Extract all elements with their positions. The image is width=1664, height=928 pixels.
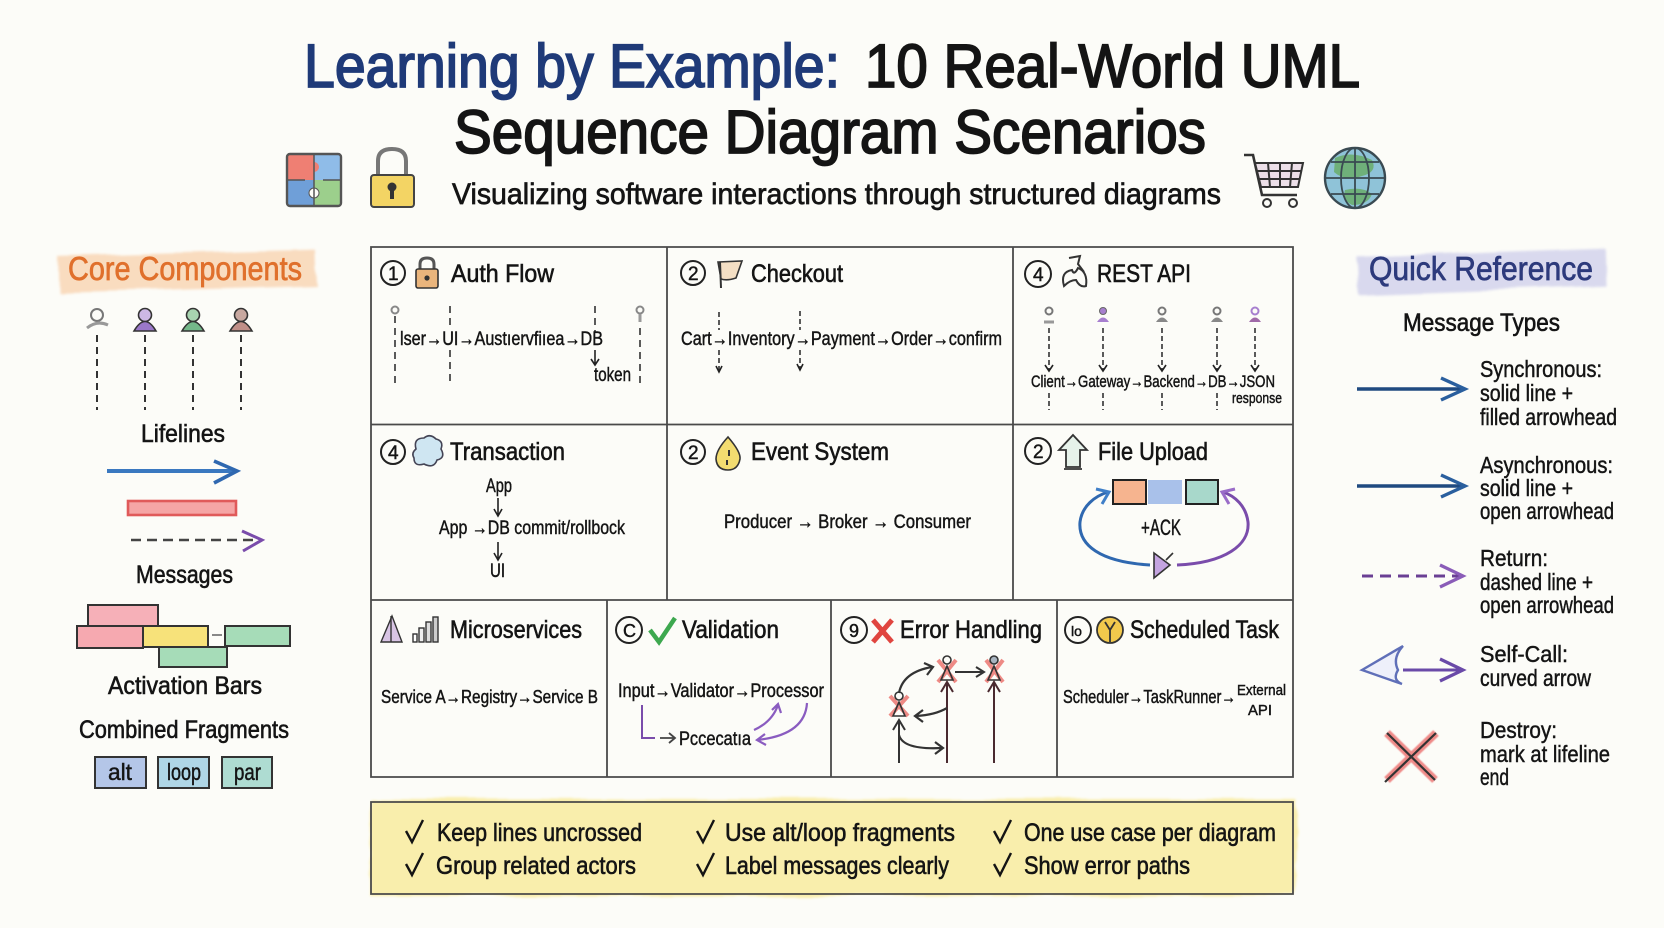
activation bars	[77, 605, 290, 667]
item: destroy: Destroy:	[1480, 717, 1557, 743]
flow: transaction: App →DB commit/rollbock	[439, 518, 625, 539]
title: Sequence Diagram Scenarios	[454, 98, 1206, 166]
flow: microservices: Service A→Registry→Service B	[381, 687, 598, 707]
column: tips 1	[406, 819, 642, 880]
sequence sketch: auth	[392, 306, 644, 386]
card: scheduled task	[1063, 616, 1286, 719]
panel: quick reference	[1357, 249, 1617, 790]
column: tips 3: One use case per diagram	[1024, 819, 1276, 847]
card: scheduled task: Scheduled Task	[1130, 616, 1279, 644]
subheading: message types: Message Types	[1403, 309, 1560, 337]
flow: scheduled task: API	[1248, 702, 1272, 719]
flow: validation: Input→Validator→Processor	[618, 681, 825, 702]
upload diagram	[1080, 480, 1248, 578]
card: auth flow: Auth Flow	[451, 260, 555, 288]
sequence sketch: checkout: Cart→Inventory→Payment→Order→confirm	[681, 329, 1002, 350]
card: event system: Event System	[751, 438, 889, 466]
upload diagram: +ACK	[1141, 515, 1181, 540]
sequence sketch: rest: response	[1232, 390, 1282, 407]
card: transaction	[381, 436, 625, 582]
card: error handling: 9	[849, 621, 859, 641]
card: event system: 2	[688, 443, 699, 464]
icon: upload arrow	[1059, 435, 1087, 469]
item: destroy	[1385, 717, 1610, 790]
item: self-call: Self-Call:	[1480, 641, 1568, 667]
label: activation bars: Activation Bars	[108, 672, 262, 700]
item: asynchronous: Asynchronous:	[1480, 452, 1613, 478]
flow: scheduled task	[1063, 682, 1286, 719]
card: validation	[616, 616, 825, 750]
flow: transaction	[439, 476, 625, 582]
column: tips 1: Keep lines uncrossed	[437, 819, 642, 847]
flow: transaction: App	[486, 476, 512, 497]
item: asynchronous: solid line +	[1480, 475, 1573, 501]
label: lifelines: Lifelines	[141, 420, 225, 448]
item: synchronous: Synchronous:	[1480, 356, 1602, 382]
item: return: dashed line +	[1480, 569, 1593, 595]
card: error handling	[841, 616, 1042, 763]
item: return: open arrowhead	[1480, 592, 1614, 618]
icon: puzzle	[287, 154, 341, 206]
icon: padlock	[371, 149, 414, 207]
label: messages: Messages	[136, 561, 233, 589]
sequence sketch: rest: Client→Gateway→Backend→DB→JSON	[1031, 372, 1275, 391]
heading: quick reference: Quick Reference	[1369, 250, 1593, 287]
flow: transaction: UI	[490, 561, 505, 582]
icon: rest api	[1063, 256, 1086, 286]
icon: globe	[1325, 148, 1385, 208]
card: checkout: Checkout	[751, 260, 843, 288]
item: destroy: mark at lifeline	[1480, 741, 1610, 767]
card: auth flow	[381, 258, 644, 386]
column: tips 2: Label messages clearly	[725, 852, 949, 880]
panel: best practices	[370, 799, 1296, 896]
label: combined fragments: Combined Fragments	[79, 716, 289, 744]
column: tips 3	[994, 819, 1276, 880]
card: error handling: Error Handling	[900, 616, 1042, 644]
sequence sketch: auth: lser→UI→Austıervfiıea→DB	[400, 329, 603, 350]
card: checkout	[681, 260, 1002, 372]
icon: lock	[416, 258, 438, 288]
card: transaction: 4	[388, 443, 399, 464]
icon: check	[650, 618, 675, 642]
item: return: Return:	[1480, 545, 1548, 571]
panel: scenario grid	[371, 247, 1293, 777]
icon: flag	[718, 261, 742, 288]
icon: shopping cart	[1244, 155, 1303, 207]
flow: scheduled task: Scheduler→TaskRunner→	[1063, 687, 1236, 707]
item: asynchronous: open arrowhead	[1480, 498, 1614, 524]
column: tips 2	[697, 819, 955, 880]
item: self-call: curved arrow	[1480, 665, 1591, 691]
flow: validation: Pccecatıa	[679, 729, 751, 750]
heading: core components: Core Components	[68, 250, 302, 287]
title: Learning by Example:	[304, 32, 840, 100]
card: rest api: REST API	[1097, 260, 1191, 288]
card: file upload	[1025, 435, 1248, 578]
item: return	[1362, 545, 1614, 618]
icon: cloud	[413, 436, 443, 466]
item: synchronous: filled arrowhead	[1480, 404, 1617, 430]
fragment tags: alt	[108, 759, 133, 785]
sequence sketch: checkout	[681, 311, 1002, 372]
card: transaction: Transaction	[450, 438, 565, 466]
title: 10 Real-World UML	[865, 32, 1360, 100]
flow: validation	[618, 681, 825, 750]
card: validation: C	[623, 621, 636, 641]
diagram: error paths	[890, 656, 1003, 763]
flow: event system: Producer → Broker → Consumer	[724, 512, 972, 533]
card: rest api: 4	[1033, 265, 1044, 286]
sequence sketch: auth: token	[594, 365, 631, 386]
card: scheduled task: lo	[1071, 623, 1082, 639]
item: destroy: end	[1480, 764, 1509, 790]
icon: tower and signal bars	[381, 616, 438, 642]
card: file upload: File Upload	[1098, 438, 1208, 466]
message samples	[107, 461, 262, 551]
column: tips 3: Show error paths	[1024, 852, 1190, 880]
flow: scheduled task: External	[1237, 682, 1286, 699]
card: file upload: 2	[1033, 442, 1044, 463]
fragment tags	[95, 757, 272, 788]
icon: drop	[716, 437, 740, 470]
fragment tags: par	[234, 759, 261, 785]
panel: core components	[58, 250, 316, 788]
card: event system	[681, 437, 972, 533]
card: checkout: 2	[688, 264, 699, 285]
column: tips 2: Use alt/loop fragments	[725, 819, 955, 847]
lifelines diagram	[87, 308, 252, 410]
icon: red x	[873, 620, 892, 642]
item: self-call	[1362, 641, 1591, 691]
icon: clock badge	[1097, 617, 1123, 643]
card: rest api	[1025, 256, 1282, 410]
sequence sketch: rest	[1031, 308, 1282, 410]
subtitle: Visualizing software interactions through structured diagrams	[452, 178, 1221, 211]
card: microservices: Microservices	[450, 616, 582, 644]
item: synchronous: solid line +	[1480, 380, 1573, 406]
card: microservices	[381, 616, 598, 707]
fragment tags: loop	[167, 759, 201, 785]
card: auth flow: 1	[388, 264, 399, 285]
item: asynchronous	[1357, 452, 1614, 524]
title	[304, 32, 1360, 166]
card: validation: Validation	[682, 616, 779, 644]
column: tips 1: Group related actors	[436, 852, 636, 880]
item: synchronous	[1357, 356, 1617, 430]
